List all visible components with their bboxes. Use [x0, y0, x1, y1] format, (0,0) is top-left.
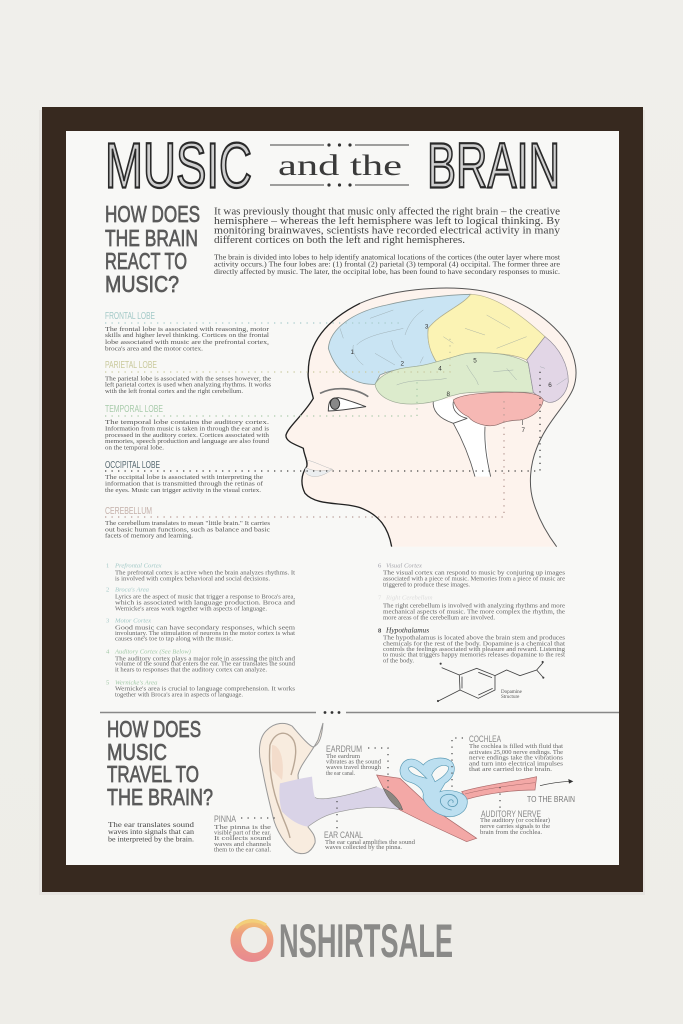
- brain stem: [433, 398, 491, 477]
- label: cochlea: and turn into electrical impulses: [469, 762, 564, 768]
- prefrontal cortex: The prefrontal cortex is active when the brain analyzes rhythms. It: [115, 570, 295, 576]
- title word: BRAIN: BRAIN: [427, 130, 560, 202]
- brain folds: [340, 310, 567, 385]
- temporal lobe: memories, speech production and language are also found: [105, 438, 270, 445]
- brain numbers: 2: [401, 360, 405, 367]
- temporal lobe: TEMPORAL LOBE: [105, 403, 163, 415]
- label: pinna: The pinna is the: [214, 825, 272, 831]
- cerebellum: out basic human functions, such as balance and basic: [105, 526, 270, 534]
- lobe: frontal: [328, 294, 471, 384]
- label: auditory nerve: The auditory (or cochlear): [480, 817, 550, 824]
- label: cochlea: that are carried to the brain.: [469, 767, 553, 773]
- wernicke's area: Wernicke's area is crucial to language comprehension. It works: [115, 686, 295, 692]
- broca's area: Wernicke's areas work together with aspects of language.: [115, 606, 267, 612]
- cerebellum: [453, 392, 543, 426]
- lobe: parietal: [428, 294, 545, 363]
- cerebellum: CEREBELLUM: [105, 505, 152, 517]
- heading: how does the brain react to music: HOW DOES: [105, 201, 200, 227]
- intro paragraph: hemisphere – whereas the left hemisphere was left to logical thinking. By: [214, 216, 561, 227]
- label: auditory nerve: brain from the cochlea.: [480, 829, 543, 836]
- temporal lobe: The temporal lobe contains the auditory cortex.: [105, 419, 269, 426]
- ear intro text: be interpreted by the brain.: [108, 836, 194, 844]
- auditory cortex: 4: [106, 648, 110, 656]
- icon: ring: [230, 919, 273, 962]
- label: pinna: visible part of the ear.: [214, 830, 272, 836]
- visual cortex: triggered to produce these images.: [383, 582, 470, 588]
- intro paragraph: different cortices on both the left and right hemispheres.: [214, 235, 465, 246]
- parietal lobe: with the left frontal cortex and the right cerebellum.: [105, 388, 243, 395]
- logo: onshirtsale: [230, 914, 453, 967]
- cochlea drawing: [400, 758, 467, 817]
- parietal lobe: The parietal lobe is associated with the senses however, the: [105, 376, 271, 382]
- lobe: occipital: [527, 337, 568, 402]
- label: cochlea: COCHLEA: [469, 734, 501, 745]
- motor cortex: causes one's toe to tap along with the music.: [115, 636, 233, 642]
- right cerebellum: Right Cerebellum: [385, 594, 433, 602]
- label: pinna: PINNA: [214, 814, 236, 825]
- label: ear canal: EAR CANAL: [324, 830, 363, 841]
- title word: MUSIC: MUSIC: [105, 130, 252, 202]
- dopamine structure: Structure: [501, 695, 520, 700]
- heading: how does the brain react to music: MUSIC?: [105, 271, 179, 297]
- heading: how does music travel to the brain: MUSIC: [107, 739, 167, 765]
- ear diagram: [259, 723, 573, 854]
- prefrontal cortex: is involved with complex behavioral and social decisions.: [115, 576, 270, 582]
- panel: cortices right column: [378, 562, 566, 702]
- label: ear canal: [324, 801, 415, 851]
- poster paper: [66, 131, 619, 865]
- occipital lobe: OCCIPITAL LOBE: [105, 459, 160, 471]
- heading: how does the brain react to music: REACT TO: [105, 248, 187, 274]
- occipital lobe: The occipital lobe is associated with interpreting the: [105, 474, 263, 481]
- heading: how does the brain react to music: [105, 201, 200, 297]
- lobes paragraph: activity occurs.) The four lobes are: (1) frontal (2) parietal (3) temporal (4) occipital. The former three are: [214, 260, 560, 268]
- title: and the: and the: [278, 149, 402, 182]
- lobes paragraph: directly affected by music. The later, the occipital lobe, has been found to have secondary responses to music.: [214, 268, 560, 276]
- brain numbers: 5: [473, 357, 477, 364]
- cerebellum: The cerebellum translates to mean "little brain." It carries: [105, 520, 270, 527]
- ear intro text: [108, 822, 195, 844]
- head silhouette: [286, 288, 576, 547]
- label: cochlea: nerve endings take the vibrations: [469, 756, 564, 762]
- label: pinna: them to the ear canal.: [214, 848, 272, 854]
- label: eardrum: [326, 744, 388, 788]
- right cerebellum: [378, 594, 565, 622]
- panel: lobe descriptions: [105, 310, 271, 540]
- brain numbers: 6: [548, 382, 552, 389]
- heading: how does music travel to the brain: HOW DOES: [107, 716, 201, 742]
- intro paragraph: [214, 206, 561, 246]
- visual cortex: The visual cortex can respond to music by conjuring up images: [383, 570, 565, 576]
- auditory nerve drawing: [462, 777, 537, 799]
- label: eardrum: vibrates as the sound: [326, 760, 381, 766]
- intro paragraph: It was previously thought that music only affected the right brain – the creative: [214, 206, 560, 218]
- label: cochlea: The cochlea is filled with fluid that: [469, 743, 563, 750]
- brain numbers: 1: [351, 349, 355, 356]
- temporal lobe: processed in the auditory cortex. Cortices associated with: [105, 432, 270, 439]
- parietal lobe: [105, 359, 271, 395]
- visual cortex: Visual Cortex: [386, 562, 422, 570]
- visual cortex: [378, 562, 565, 588]
- broca's area: 2: [106, 586, 109, 594]
- hypothalamus: controls the feelings associated with pleasure and reward. Listening: [383, 646, 566, 653]
- brain numbers: 3: [425, 324, 429, 331]
- broca's area: Broca's Area: [115, 586, 150, 594]
- hypothalamus: 8: [378, 628, 382, 634]
- hypothalamus: The hypothalamus is located above the brain stem and produces: [383, 634, 565, 642]
- heading: how does music travel to the brain: [107, 716, 213, 810]
- wernicke's area: together with Broca's area in aspects of language.: [115, 692, 243, 698]
- label: pinna: waves and channels: [214, 842, 272, 848]
- label: to the brain: TO THE BRAIN: [527, 794, 575, 804]
- label: ear canal: waves collected by the pinna.: [325, 845, 403, 851]
- brain numbers: [351, 324, 552, 434]
- prefrontal cortex: 1: [106, 562, 109, 570]
- right cerebellum: more areas of the cerebellum are involved.: [383, 614, 495, 622]
- auditory cortex: The auditory cortex plays a major role in assessing the pitch and: [115, 656, 296, 662]
- label: eardrum: The eardrum: [326, 754, 361, 760]
- hypothalamus: Hypothalamus: [385, 626, 429, 634]
- title: and the: [270, 143, 409, 187]
- visual cortex: associated with a piece of music. Memories from a piece of music are: [383, 576, 565, 582]
- arrow to the brain: [540, 779, 573, 786]
- pinna drawing: [259, 723, 323, 854]
- label: auditory nerve: [480, 787, 550, 836]
- broca's area: [106, 586, 296, 612]
- title: [105, 130, 560, 202]
- wernicke's area: Wernicke's Area: [115, 680, 158, 686]
- wernicke's area: [106, 680, 295, 698]
- frontal lobe: skills and higher level thinking. Cortices on the frontal: [105, 332, 269, 339]
- motor cortex: Good music can have secondary responses, which seem: [115, 624, 296, 632]
- heading: how does music travel to the brain: TRAVEL TO: [107, 761, 199, 787]
- hypothalamus: to music that triggers happy memories releases dopamine to the rest: [383, 652, 565, 658]
- panel: cortices left column: [106, 562, 296, 698]
- section divider: [100, 711, 619, 714]
- brain numbers: 7: [522, 427, 526, 434]
- head and brain diagram: [286, 288, 576, 547]
- prefrontal cortex: Prefrontal Cortex: [114, 562, 162, 570]
- lobe: temporal: [375, 353, 533, 404]
- label: auditory nerve: nerve carries signals to the: [480, 824, 550, 830]
- frontal lobe: FRONTAL LOBE: [105, 310, 155, 322]
- right cerebellum: mechanical aspects of music. The more complex the rhythm, the: [383, 608, 565, 616]
- label: cochlea: [452, 734, 564, 790]
- brain numbers: 8: [447, 391, 451, 398]
- ear intro text: The ear translates sound: [108, 822, 195, 829]
- label: eardrum: EARDRUM: [326, 744, 362, 755]
- label: pinna: It collects sound: [214, 836, 271, 842]
- prefrontal cortex: [106, 562, 295, 582]
- right cerebellum: 7: [378, 594, 382, 602]
- cerebellum: facets of memory and learning.: [105, 532, 193, 540]
- ear intro text: waves into signals that can: [108, 829, 195, 836]
- auditory cortex: [106, 648, 296, 674]
- label: cochlea: activates 25,000 nerve endings. The: [469, 750, 563, 756]
- lips: [305, 460, 333, 477]
- dopamine structure: [437, 661, 544, 702]
- hypothalamus: of the body.: [383, 658, 414, 664]
- broca's area: which is associated with language production. Broca and: [115, 600, 296, 606]
- label: pinna: [214, 814, 276, 854]
- auditory cortex: Auditory Cortex (See Below): [114, 648, 191, 656]
- label: auditory nerve: AUDITORY NERVE: [481, 809, 541, 820]
- heading: how does the brain react to music: THE BRAIN: [105, 225, 198, 251]
- right cerebellum: The right cerebellum is involved with analyzing rhythms and more: [383, 602, 565, 610]
- dopamine structure: Dopamine: [501, 690, 523, 695]
- broca's area: Lyrics are the aspect of music that trigger a response to Broca's area,: [115, 594, 295, 600]
- occipital lobe: [105, 459, 264, 494]
- eardrum: [383, 788, 403, 810]
- auditory cortex: it hears to responses that the auditory cortex can analyze.: [115, 666, 267, 674]
- ear canal: [279, 777, 402, 827]
- hypothalamus: [378, 626, 566, 664]
- frame: [39, 107, 645, 895]
- temporal lobe: [105, 403, 270, 452]
- brain numbers: 4: [438, 365, 442, 372]
- temporal lobe: Information from music is taken in through the ear and is: [105, 426, 269, 432]
- lobes paragraph: The brain is divided into lobes to help identify anatomical locations of the cortices (the outer layer where most: [214, 254, 560, 262]
- label: ear canal: The ear canal amplifies the sound: [325, 839, 415, 846]
- hypothalamus: chemicals for the rest of the body. Dopamine is a chemical that: [383, 640, 565, 648]
- motor cortex: 3: [106, 618, 110, 624]
- heading: how does music travel to the brain: THE BRAIN?: [107, 784, 213, 810]
- wernicke's area: 5: [106, 680, 110, 686]
- motor cortex: [106, 618, 296, 642]
- frontal lobe: The frontal lobe is associated with reasoning, motor: [105, 326, 270, 333]
- cerebellum: [105, 505, 270, 540]
- frontal lobe: broca's area and the motor cortex.: [105, 346, 203, 352]
- eye: [320, 389, 368, 411]
- occipital lobe: the eyes. Music can trigger activity in the visual cortex.: [105, 487, 261, 494]
- lobes paragraph: [214, 254, 560, 276]
- occipital lobe: information that is transmitted through the retinas of: [105, 480, 264, 488]
- temporal lobe: on the temporal lobe.: [105, 444, 164, 452]
- ear passage: [377, 775, 477, 842]
- visual cortex: 6: [378, 562, 382, 570]
- intro paragraph: monitoring brainwaves, scientists have recorded electrical activity in many: [214, 226, 561, 236]
- frontal lobe: lobe associated with music are the prefrontal cortex,: [105, 339, 269, 346]
- logo: onshirtsale: NSHIRTSALE: [279, 914, 453, 967]
- motor cortex: Motor Cortex: [114, 618, 151, 624]
- label: eardrum: waves travel through: [326, 765, 381, 771]
- frontal lobe: [105, 310, 270, 352]
- parietal lobe: PARIETAL LOBE: [105, 359, 157, 371]
- motor cortex: involuntary. The stimulation of neurons in the motor cortex is what: [115, 630, 295, 637]
- auditory cortex: volume of the sound that enters the ear. The ear translates the sound: [115, 660, 296, 668]
- label: eardrum: the ear canal.: [326, 771, 356, 777]
- parietal lobe: left parietal cortex is used when analyzing rhythms. It works: [105, 382, 271, 388]
- leader dotted lines: [105, 323, 540, 517]
